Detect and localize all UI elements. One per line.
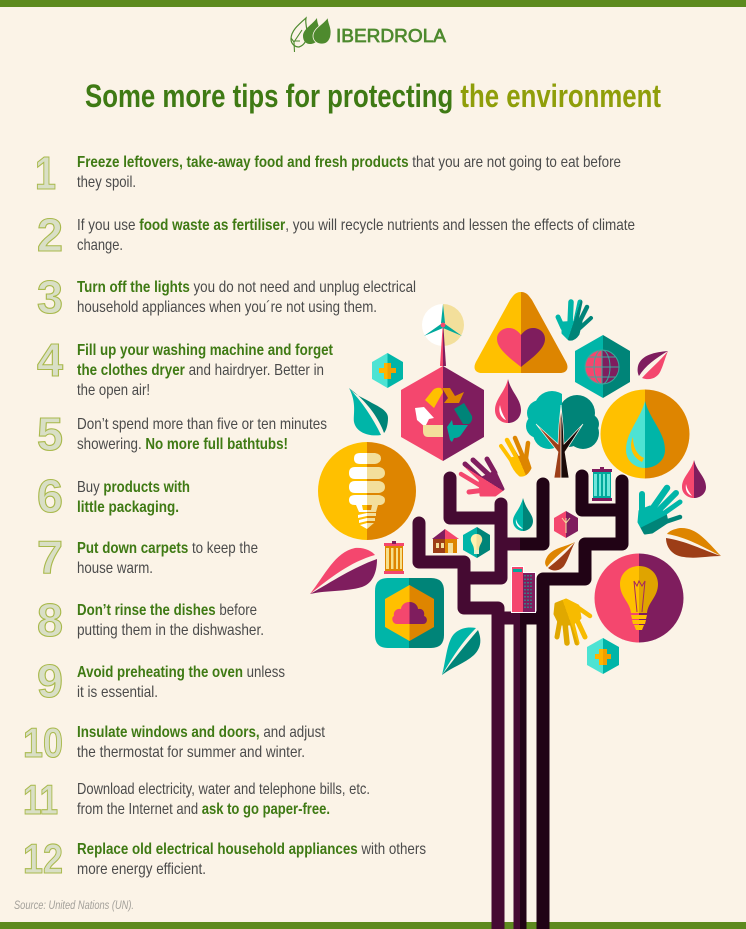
icon: small hexagon bulb	[463, 527, 490, 558]
icon: orange hand	[501, 438, 530, 475]
icon: big teal hand	[639, 488, 680, 533]
tip 5: 5	[37, 408, 63, 460]
tip 1: 1	[35, 147, 56, 199]
tip 12: more energy efficient.	[77, 861, 206, 878]
tip 2: change.	[77, 237, 123, 254]
tip 8: putting them in the dishwasher.	[77, 622, 264, 639]
tip 1	[35, 147, 621, 199]
tip 4: the open air!	[77, 382, 150, 399]
tip 6: 6	[37, 470, 63, 522]
icon: yellow trash can	[384, 541, 404, 574]
tip 10: Insulate windows and doors, and adjust	[77, 724, 325, 741]
tip 2: If you use food waste as fertiliser, you will recycle nutrients and lessen the effects of climate	[77, 217, 635, 234]
tip 8: Don’t rinse the dishes before	[77, 602, 257, 619]
icon: drop pink purple	[495, 379, 521, 423]
tip 6	[37, 470, 190, 522]
tip 4: Fill up your washing machine and forget	[77, 342, 334, 359]
tip 3: 3	[37, 271, 63, 323]
icon: small pink hexagon turbine	[554, 511, 578, 538]
top green bar	[0, 0, 746, 7]
tip 6: Buy products with	[77, 479, 190, 496]
tip 9: 9	[37, 655, 63, 707]
tip 11: 11	[23, 776, 58, 823]
icon: pink lightbulb circle	[594, 554, 684, 642]
tip 11	[23, 776, 370, 823]
tip 9: Avoid preheating the oven unless	[77, 664, 285, 681]
icon: small orange leaf	[545, 542, 575, 570]
tip 7: house warm.	[77, 560, 153, 577]
tip 10: the thermostat for summer and winter.	[77, 744, 305, 761]
tip 4	[37, 334, 334, 399]
tip 2: 2	[37, 209, 63, 261]
tip 12	[23, 835, 426, 882]
tip 10	[23, 719, 325, 766]
logo wordmark: IBERDROLA	[336, 25, 447, 46]
tip 6: little packaging.	[77, 499, 179, 516]
tip 9	[37, 655, 285, 707]
icon: teal hand top	[558, 302, 591, 339]
icon: water drop circle	[600, 390, 690, 479]
icon: pink and purple hand	[461, 459, 503, 495]
tip 10: 10	[23, 719, 63, 766]
tip 12: 12	[23, 835, 63, 882]
icon: house	[432, 529, 459, 553]
icon: small hexagon with plus	[372, 353, 403, 388]
tip 9: it is essential.	[77, 684, 158, 701]
tip 1: they spoil.	[77, 174, 136, 191]
tip 5: Don’t spend more than five or ten minutes	[77, 416, 327, 433]
tree illustration	[310, 292, 721, 929]
tip 11: from the Internet and ask to go paper-free.	[77, 801, 330, 818]
title: Some more tips for protecting the environment	[85, 78, 661, 114]
tip 3: Turn off the lights you do not need and unplug electrical	[77, 279, 416, 296]
tip 1: Freeze leftovers, take-away food and fresh products that you are not going to eat before	[77, 154, 621, 171]
tip 2	[37, 209, 635, 261]
icon: tree	[526, 391, 599, 478]
tip 4: the clothes dryer and hairdryer. Better in	[77, 362, 324, 379]
icon: globe hexagon	[575, 335, 630, 398]
tip 11: Download electricity, water and telephone bills, etc.	[77, 781, 370, 798]
tip 3: household appliances when you´re not using them.	[77, 299, 377, 316]
tip 5: showering. No more full bathtubs!	[77, 436, 288, 453]
icon: lightbulb circle	[318, 442, 416, 540]
icon: triangle with heart	[475, 292, 567, 373]
icon: teal leaf	[349, 388, 388, 435]
icon: big pink and purple leaf	[310, 548, 377, 594]
tip 4: 4	[37, 334, 63, 386]
bottom green bar	[0, 922, 746, 929]
tip 7	[37, 531, 258, 583]
tip 3	[37, 271, 416, 323]
icon: orange leaf right	[666, 528, 721, 558]
tip 8	[37, 594, 264, 646]
icon: yellow hand	[555, 600, 590, 643]
tip 12: Replace old electrical household appliances with others	[77, 841, 426, 858]
icon: recycling hexagon	[401, 366, 484, 461]
tip 7: 7	[37, 531, 63, 583]
icon: purple and pink leaf	[638, 351, 668, 379]
logo: Iberdrola	[291, 17, 447, 52]
icon: cloud app tile	[375, 578, 444, 648]
icon: small teal drop	[513, 498, 533, 531]
tip 7: Put down carpets to keep the	[77, 540, 258, 557]
source note: Source: United Nations (UN).	[14, 900, 134, 912]
icon: bottom teal leaf	[442, 628, 480, 675]
tree trunk and branches	[419, 476, 622, 929]
tip 8: 8	[37, 594, 63, 646]
icon: drop right	[682, 460, 706, 498]
icon: building	[511, 566, 536, 613]
tip 5	[37, 408, 327, 460]
icon: wind turbine	[422, 304, 464, 366]
icon: teal trash can	[592, 467, 612, 501]
tips list	[23, 147, 635, 882]
icon: logo leaves	[291, 17, 331, 52]
icon: bottom hexagon with plus	[587, 638, 619, 674]
